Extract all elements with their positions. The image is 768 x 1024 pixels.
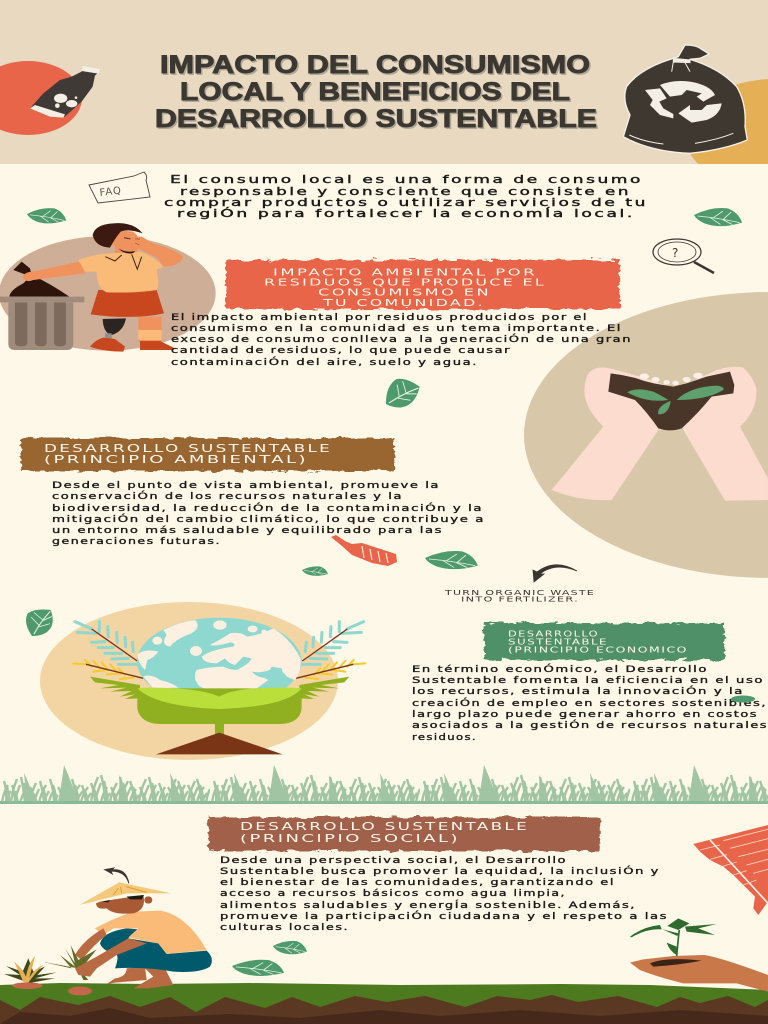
icon: leaf top left [27,208,66,223]
text block: impacto: cantidad de residuos, lo que puede causar [171,345,511,356]
text block: principio economico [412,663,768,743]
illustration: tan circle with hands [524,292,768,578]
icon: leaf below text [425,551,478,569]
illustration: globe in plant [40,602,365,760]
illustration: red paper scrap [693,825,768,915]
text block: principio social: el bienestar de las comunidades, garantizando el [220,877,615,888]
text block: impacto: contaminaciÓn del aire, suelo y agua. [171,356,478,368]
text block: principio economico: asociados a la gestiÓn de recursos naturales [412,719,768,731]
title: LOCAL Y BENEFICIOS DEL [180,78,570,106]
banner: impacto ambiental: TU COMUNIDAD. [321,298,485,309]
banner: principio social: DESARROLLO SUSTENTABLE [240,820,529,833]
fronds [73,622,365,699]
banner: principio economico: SUSTENTABLE [508,636,608,646]
icon: curved arrow [533,565,577,582]
text block: principio ambiental: Desde el punto de vista ambiental, promueve la [52,480,440,491]
icon: magnifier: ? [672,246,678,260]
icon: bottle [30,66,101,118]
icon: small leaf [302,566,328,576]
banner: principio social: (PRINCIPIO SOCIAL) [240,832,460,845]
banner: principio ambiental [21,438,394,471]
shirt [95,911,207,954]
illustration: hand with sprout [630,918,768,992]
title: IMPACTO DEL CONSUMISMO [160,51,590,79]
banner: principio economico: DESARROLLO [508,628,599,638]
pants [100,928,212,972]
caption: organic waste: INTO FERTILIZER. [461,596,579,604]
text block: principio ambiental [52,480,485,547]
text block: principio ambiental: un entorno más saludable y equilibrado para las [52,525,443,536]
text block: intro: responsable y consciente que consiste en [180,186,631,198]
hat [79,882,172,905]
title [155,51,597,133]
seedling [42,945,97,980]
text block: intro: El consumo local es una forma de consumo [170,174,643,186]
panel: header [0,0,768,164]
caption: organic waste [443,589,595,604]
banner: impacto ambiental [226,260,620,309]
icon: larger ground leaf [232,960,284,976]
icon: leaf center [378,371,424,416]
bowl [137,688,302,724]
icon: FAQ note: FAQ [99,185,123,199]
text block: principio ambiental: conservaciÓn de los recursos naturales y la [52,490,403,502]
text block: intro: comprar productos o utilizar servicios de tu [164,197,648,209]
banner: principio economico [484,623,724,660]
caption: organic waste: TURN ORGANIC WASTE [443,589,595,597]
icon: plastic bottle [331,535,397,566]
text block: impacto: consumismo en la comunidad es un tema importante. El [171,323,622,334]
illustration: ground [0,983,768,1024]
icon: small plant with mound [4,956,57,989]
text block: impacto: El impacto ambiental por residuos producidos por el [171,312,588,323]
arrow over hat [103,867,129,883]
arms [75,928,107,960]
icon: magnifier [653,239,714,273]
illustration: farmer [42,867,212,988]
text block: principio social: Sustentable busca promover la equidad, la inclusiÓn y [220,865,660,877]
icon: stone [68,986,92,996]
banner: principio ambiental: (PRINCIPIO AMBIENTAL) [44,453,308,466]
icon: trash can [0,262,84,350]
text block: principio social: acceso a recursos básicos como agua limpia, [220,888,566,899]
legs [107,967,147,984]
text block: principio economico: largo plazo puede generar ahorro en costos [412,709,758,720]
text block: principio ambiental: generaciones futuras. [52,536,221,547]
text block: principio ambiental: mitigaciÓn del cambio climático, lo que contribuye a [52,513,485,525]
face [96,895,144,914]
icon: leaves near ground [273,941,307,954]
text block: principio economico: los recursos, estimula la innovaciÓn y la [412,685,744,697]
text block: impacto: exceso de consumo conlleva a la generaciÓn de una gran [171,333,632,345]
banner: impacto ambiental: CONSUMISMO EN [318,288,491,298]
banner: impacto ambiental: IMPACTO AMBIENTAL POR [273,268,537,278]
text block: principio social: culturas locales. [220,922,349,933]
icon: recycling bag [623,45,747,153]
text block: principio economico: Sustentable fomenta la eficiencia en el uso [412,675,764,686]
icon: yellow circle [690,79,768,164]
globe [137,618,302,706]
text block: intro [164,174,648,220]
text block: intro: regiÓn para fortalecer la economÍa local. [177,207,635,220]
text block: principio economico: creaciÓn de empleo en sectores sostenibles, [412,697,767,709]
text block: principio social: Desde una perspectiva social, el Desarrollo [220,855,567,866]
icon: leaf top right [694,208,742,226]
text block: principio social: alimentos saludables y energÍa sostenible. Además, [220,899,636,911]
icon: FAQ note [89,172,150,203]
icon: tiny leaf on text [731,696,755,702]
icon: leaf mid left [22,604,56,640]
text block: principio ambiental: biodiversidad, la reducciÓn de la contaminaciÓn y la [52,502,483,514]
child figure [23,223,183,352]
text block: principio social: promueve la participaciÓn ciudadana y el respeto a las [220,910,668,922]
grass strip [0,765,768,804]
text block: principio economico: residuos. [412,732,477,743]
banner: principio economico: (PRINCIPIO ECONOMICO [508,644,688,654]
icon: coral circle [0,61,82,135]
title: DESARROLLO SUSTENTABLE [155,105,597,133]
text block: impacto [171,312,632,368]
banner: impacto ambiental: RESIDUOS QUE PRODUCE EL [264,278,546,288]
soil mound [156,733,283,754]
banner: principio ambiental: DESARROLLO SUSTENTABLE [44,442,332,455]
illustration: child with trash bag [0,223,216,352]
text block: principio social [220,855,668,933]
banner: principio social [208,817,600,851]
text block: principio economico: En término econÓmico, el Desarrollo [412,663,708,675]
